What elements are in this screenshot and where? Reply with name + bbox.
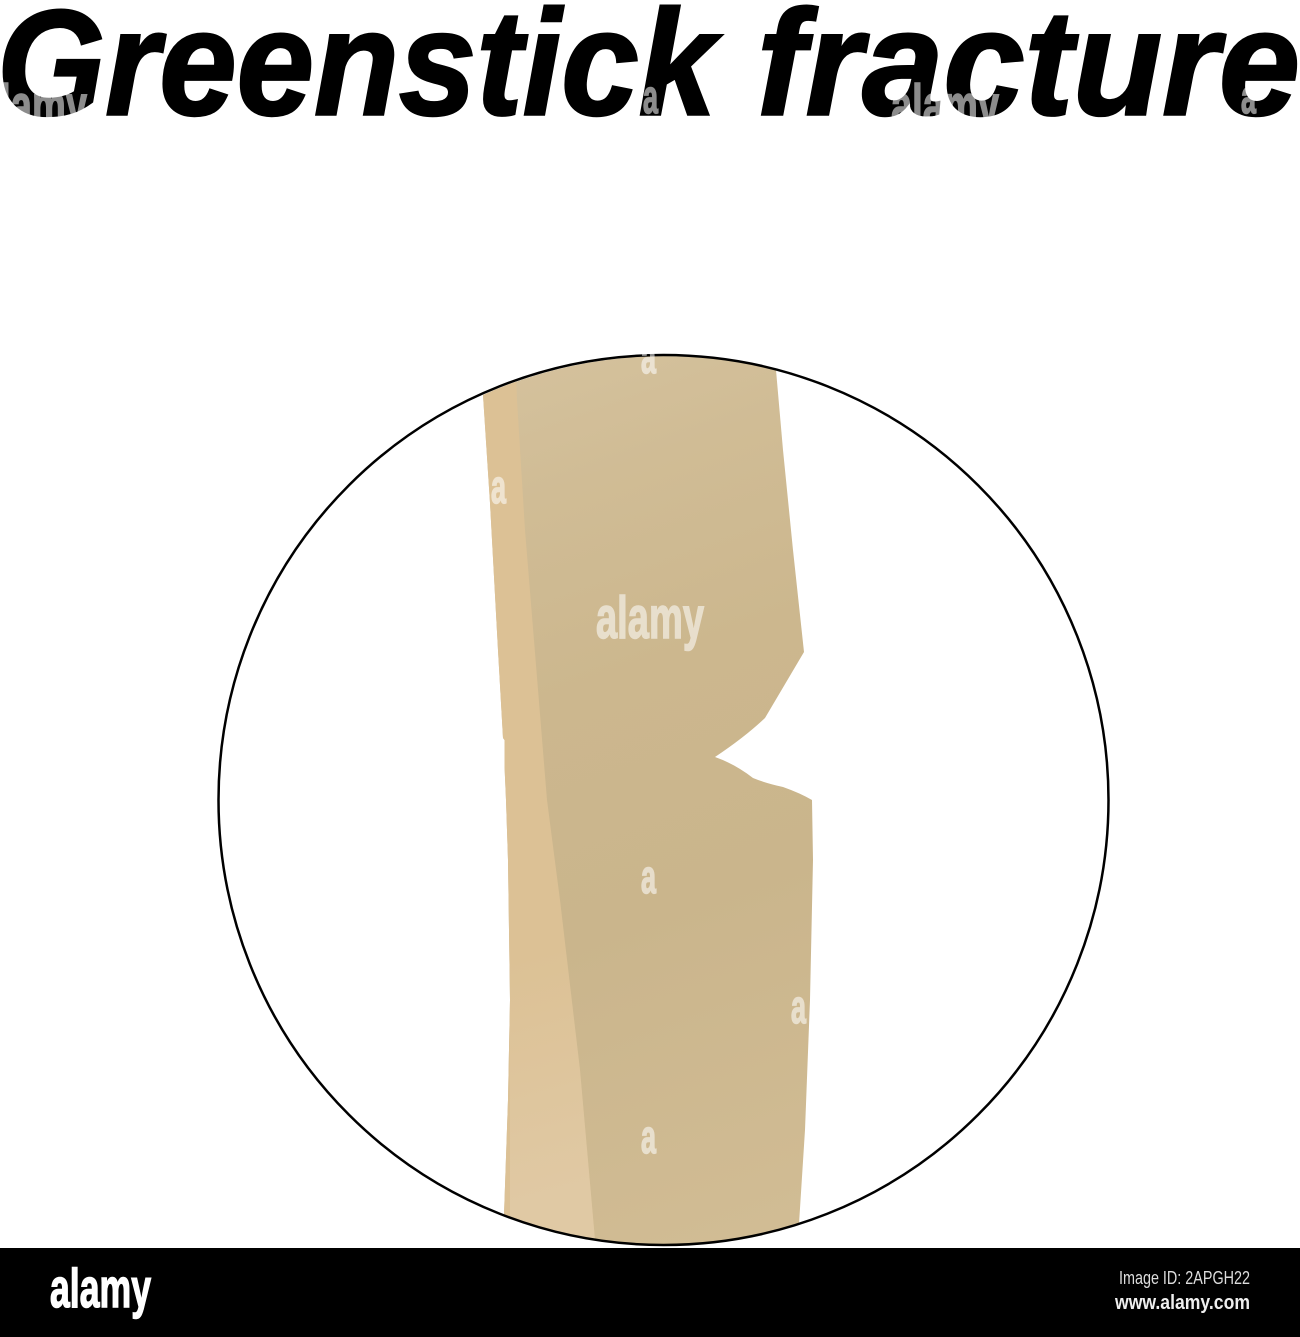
- bone watermarks: a: [641, 330, 656, 383]
- website: www.alamy.com: [1114, 1292, 1250, 1314]
- title watermarks: a: [643, 70, 658, 123]
- bone watermarks: a: [641, 850, 656, 903]
- bone watermarks: a: [641, 1110, 656, 1163]
- title watermarks: a: [1241, 70, 1256, 123]
- bone lower light patch: [510, 1076, 595, 1238]
- title watermarks: alamy: [891, 73, 999, 139]
- bone watermarks: a: [491, 460, 506, 513]
- title watermarks: [0, 70, 1256, 139]
- image id: Image ID: 2APGH22: [1119, 1268, 1250, 1288]
- title: [0, 0, 1300, 146]
- bone shaft: [470, 350, 830, 1250]
- footer logo: alamy: [50, 1257, 151, 1319]
- bone watermarks: alamy: [596, 585, 704, 651]
- footer bar: [0, 1248, 1300, 1337]
- title watermarks: a: [342, 70, 357, 123]
- bone watermarks: [491, 330, 806, 1163]
- circle outline: [218, 355, 1108, 1245]
- bone highlight stripe: [483, 382, 579, 1216]
- bone watermarks: a: [791, 980, 806, 1033]
- fractured bone illustration: [470, 350, 830, 1250]
